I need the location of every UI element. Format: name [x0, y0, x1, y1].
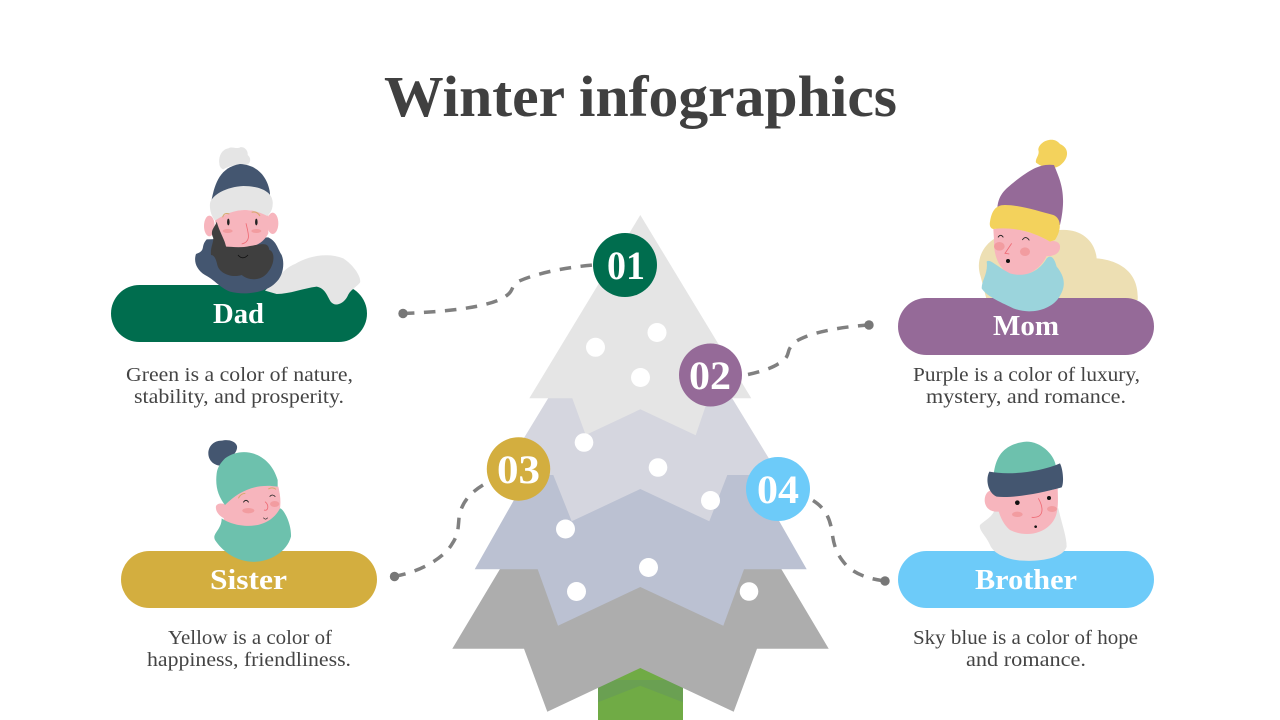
- pill: Mom: [898, 298, 1154, 355]
- number badge 01: [593, 233, 657, 297]
- character: Sister: [208, 440, 291, 562]
- snow dots: [556, 323, 758, 601]
- connector: 04 to Brother: [813, 500, 890, 586]
- panel: Dad: [111, 147, 367, 342]
- number badge 02: [679, 344, 742, 406]
- text block: Mom description: Purple is a color of luxury,: [913, 364, 1140, 386]
- tree tier 1: [529, 215, 751, 435]
- title: Winter infographics: [384, 64, 897, 129]
- character: Mom: [982, 140, 1067, 311]
- connector: 02 to Mom: [748, 320, 874, 374]
- text block: Mom description: [913, 364, 1140, 408]
- christmas tree: [452, 215, 829, 720]
- label: Brother: Brother: [975, 564, 1077, 596]
- text block: Sister description: Yellow is a color of: [168, 627, 332, 649]
- character: Dad: [195, 147, 360, 305]
- text block: Brother description: and romance.: [966, 649, 1086, 671]
- number badge 03: 03: [497, 447, 540, 492]
- text block: Mom description: mystery, and romance.: [926, 386, 1126, 408]
- pill: Dad: [111, 285, 367, 342]
- text block: Dad description: [126, 364, 353, 408]
- connector: 03 to Sister: [390, 485, 483, 581]
- text block: Dad description: stability, and prosperity.: [134, 386, 344, 408]
- text block: Sister description: [147, 627, 351, 671]
- pill: Brother: [898, 551, 1154, 608]
- panel: Sister: [121, 440, 377, 608]
- panel: Mom: [898, 140, 1154, 355]
- tree tier 2: [502, 398, 779, 521]
- text block: Brother description: [913, 627, 1138, 671]
- label: Mom: Mom: [993, 310, 1059, 342]
- label: Sister: Sister: [210, 564, 287, 596]
- pill: Sister: [121, 551, 377, 608]
- text block: Brother description: Sky blue is a color of hope: [913, 627, 1138, 649]
- text block: Dad description: Green is a color of nature,: [126, 364, 353, 386]
- tree tier 4: [452, 569, 829, 712]
- number badge 04: [746, 457, 810, 521]
- tree tier 3: [475, 470, 807, 626]
- number badge 02: 02: [689, 353, 731, 398]
- panel: Brother: [898, 442, 1154, 608]
- tree trunk: [598, 660, 683, 720]
- text block: Sister description: happiness, friendliness.: [147, 649, 351, 671]
- number badge 03: [487, 437, 550, 501]
- hair: Mom: [979, 230, 1138, 300]
- number badge 01: 01: [607, 243, 645, 288]
- label: Dad: Dad: [213, 298, 264, 330]
- number badge 04: 04: [757, 467, 799, 512]
- character: Brother: [980, 442, 1067, 561]
- connector: 01 to Dad: [398, 265, 593, 318]
